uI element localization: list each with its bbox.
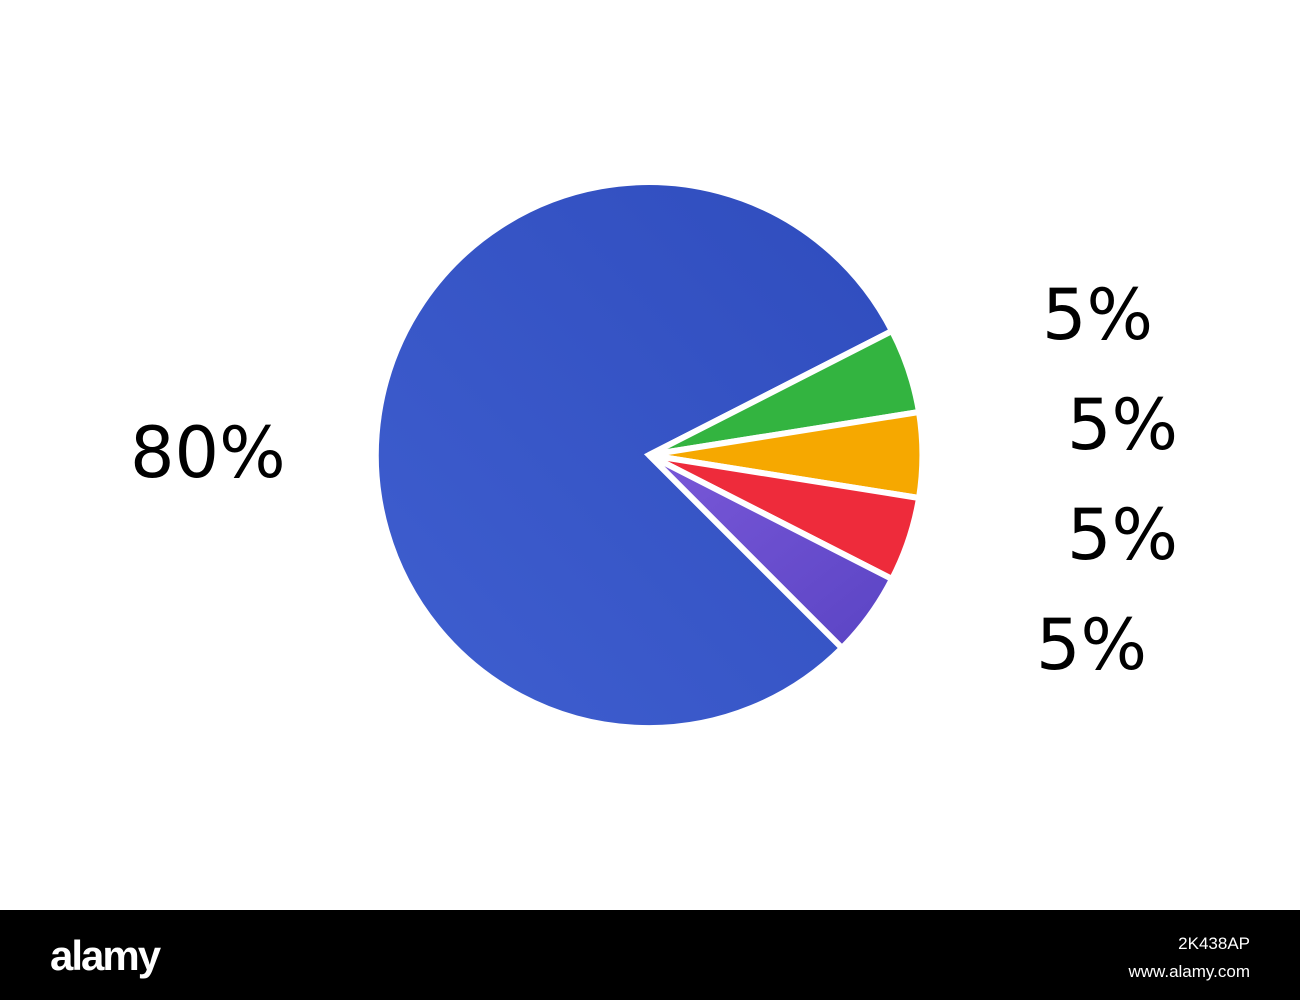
- slice: blue 80%: [376, 182, 892, 728]
- label 80%: 80%: [130, 412, 286, 494]
- footer id: [1128, 934, 1250, 981]
- slice: red 5%: [649, 455, 919, 579]
- footer logo: alamy: [50, 932, 159, 979]
- footer id: 2K438AP: [1178, 934, 1250, 953]
- footer id: www.alamy.com: [1128, 962, 1250, 981]
- slice: purple 5%: [649, 455, 892, 648]
- slice: green 5%: [649, 331, 919, 455]
- label 5% purple: 5%: [1036, 604, 1147, 686]
- label 5% red: 5%: [1067, 494, 1178, 576]
- footer bar: [0, 910, 1300, 1000]
- label 5% green: 5%: [1042, 274, 1153, 356]
- label 5% orange: 5%: [1067, 384, 1178, 466]
- slice: orange 5%: [649, 412, 922, 498]
